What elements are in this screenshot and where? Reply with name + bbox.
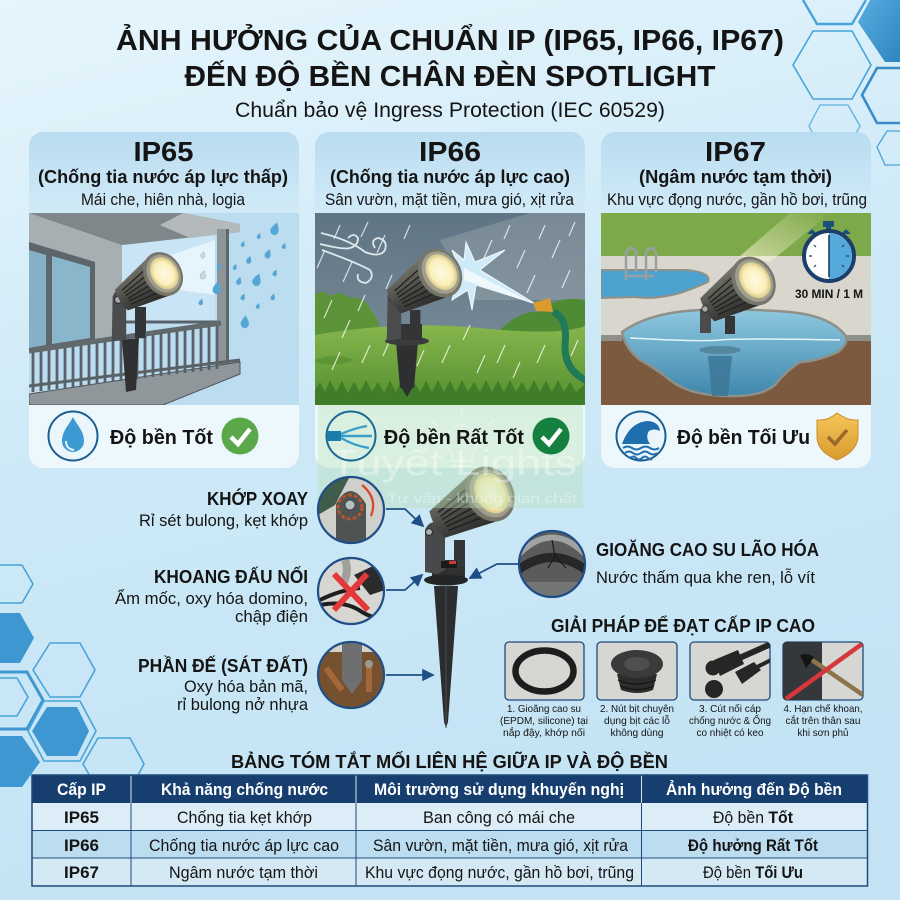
caption xyxy=(600,703,674,739)
table row: IP66: Độ hưởng Rất Tốt xyxy=(688,837,818,855)
decorative hexagons: bottom left xyxy=(0,565,144,790)
table header row: Ảnh hưởng đến Độ bền xyxy=(666,780,842,799)
caption: co nhiệt có keo xyxy=(696,727,764,739)
caption: nắp đậy, khớp nối xyxy=(503,726,585,739)
rating text: IP67: Độ bền Tối Ưu xyxy=(677,427,810,449)
caption: dụng bịt các lỗ xyxy=(604,714,670,727)
table row: IP67: Độ bền Tối Ưu xyxy=(703,864,803,882)
panel: IP66 xyxy=(315,132,590,468)
heading: IP65: IP65 xyxy=(134,136,194,167)
table header row: Môi trường sử dụng khuyến nghị xyxy=(374,780,624,799)
caption: không dùng xyxy=(610,727,664,739)
callout: Gioăng cao su xyxy=(470,531,819,598)
caption xyxy=(689,703,771,739)
table row: IP67: Ngâm nước tạm thời xyxy=(169,864,318,882)
panel: IP67 xyxy=(601,132,871,468)
table row: IP65: Ban công có mái che xyxy=(423,809,575,827)
callout heading: KHOANG ĐẤU NỐI xyxy=(154,566,308,587)
solution 3: waterproof connector xyxy=(689,642,771,739)
table row: IP66 xyxy=(64,836,818,855)
table row: IP65: Độ bền Tốt xyxy=(713,809,793,827)
table heading: BẢNG TÓM TẮT MỐI LIÊN HỆ GIỮA IP VÀ ĐỘ BỀN xyxy=(231,751,668,772)
usage text: IP66: Sân vườn, mặt tiền, mưa gió, xịt rửa xyxy=(325,191,575,209)
section heading: GIẢI PHÁP ĐỂ ĐẠT CẤP IP CAO xyxy=(551,615,815,636)
panel: IP65 xyxy=(29,132,299,468)
icon: stopwatch 30 min xyxy=(804,221,854,281)
rating text: IP66: Độ bền Rất Tốt xyxy=(384,427,524,449)
arrow xyxy=(386,509,423,526)
stopwatch caption: 30 MIN / 1 M xyxy=(795,289,863,301)
subheading: IP66: (Chống tia nước áp lực cao) xyxy=(330,166,570,187)
subheading: IP67: (Ngâm nước tạm thời) xyxy=(639,166,832,187)
icon: water jet xyxy=(326,412,376,460)
main spotlight diagram xyxy=(421,457,525,728)
solution 4: avoid drilling xyxy=(783,642,863,739)
detail circle: cracked gasket xyxy=(518,531,586,598)
callout: Phần đế xyxy=(138,642,433,714)
title xyxy=(116,23,784,93)
table row: IP66: Chống tia nước áp lực cao xyxy=(149,837,339,855)
callout: Khớp xoay xyxy=(139,476,423,545)
callout text: rỉ bulong nở nhựa xyxy=(177,695,309,714)
watermark: Tuyết Lights: Tuyết Lights xyxy=(330,442,577,483)
title: ẢNH HƯỞNG CỦA CHUẨN IP (IP65, IP66, IP67) xyxy=(116,23,784,57)
title: ĐẾN ĐỘ BỀN CHÂN ĐÈN SPOTLIGHT xyxy=(184,59,716,93)
table row: IP67: IP67 xyxy=(64,863,99,882)
caption: 4. Hạn chế khoan, xyxy=(784,703,862,715)
table row: IP65: Chống tia kẹt khớp xyxy=(177,809,312,827)
table header row: Cấp IP xyxy=(57,780,106,799)
illustration: balcony with spotlight and light rain xyxy=(29,213,299,405)
table row: IP65 xyxy=(64,808,793,827)
status strip: IP66 xyxy=(315,405,585,468)
icon: gold shield xyxy=(817,413,858,460)
section: solutions xyxy=(500,615,863,739)
callout text: Nước thấm qua khe ren, lỗ vít xyxy=(596,568,815,587)
subheading: IP65: (Chống tia nước áp lực thấp) xyxy=(38,166,288,187)
table header row xyxy=(57,780,842,799)
table row: IP65: IP65 xyxy=(64,808,99,827)
table row: IP66: IP66 xyxy=(64,836,99,855)
callout text: Ẩm mốc, oxy hóa domino, xyxy=(115,589,308,608)
solution 1: rubber gasket xyxy=(500,642,588,739)
arrow xyxy=(386,674,433,676)
caption xyxy=(784,703,862,739)
caption: khi sơn phủ xyxy=(798,727,849,739)
icon: dark green check xyxy=(532,418,570,454)
caption: (EPDM, silicone) tại xyxy=(500,715,588,727)
heading: IP67: IP67 xyxy=(705,136,766,167)
caption: cắt trên thân sau xyxy=(786,714,861,727)
icon: wave xyxy=(616,412,666,460)
status strip: IP67 xyxy=(601,405,871,468)
table row: IP67 xyxy=(64,863,803,882)
arrow xyxy=(470,564,518,578)
rating text: IP65: Độ bền Tốt xyxy=(110,427,213,449)
callout text xyxy=(177,677,309,714)
callout heading: KHỚP XOAY xyxy=(207,488,308,509)
illustration: rainy garden with hose spraying spotlight xyxy=(315,213,590,405)
callout: Khoang đấu nối xyxy=(115,558,422,626)
caption: 3. Cút nối cáp xyxy=(699,703,761,715)
detail circle: damaged wiring xyxy=(318,558,385,624)
heading: IP66: IP66 xyxy=(419,136,481,167)
status row content: IP66 xyxy=(326,412,570,460)
icon: green check xyxy=(222,418,258,454)
callout text xyxy=(115,589,308,626)
subtitle: Chuẩn bảo vệ Ingress Protection (IEC 60529) xyxy=(235,99,665,122)
callout heading: GIOĂNG CAO SU LÃO HÓA xyxy=(596,539,819,560)
solution 2: sealing plug xyxy=(597,642,677,739)
watermark: Tuyết Lights: Tư vấn - không gian chất xyxy=(387,490,577,506)
summary table xyxy=(32,775,868,886)
caption: 2. Nút bịt chuyên xyxy=(600,703,674,715)
usage text: IP65: Mái che, hiên nhà, logia xyxy=(81,191,246,209)
callout text: chập điện xyxy=(235,607,308,626)
caption xyxy=(500,703,588,739)
caption: chống nước & Ống xyxy=(689,713,771,727)
caption: 1. Gioăng cao su xyxy=(507,703,581,715)
detail circle: corroded base in soil xyxy=(318,642,384,708)
table header row: Khả năng chống nước xyxy=(161,780,328,799)
usage text: IP67: Khu vực đọng nước, gần hồ bơi, trũng xyxy=(607,191,867,209)
callout text: Oxy hóa bản mã, xyxy=(184,677,308,696)
decorative hexagons: top right xyxy=(793,0,900,165)
illustration: submerged spotlight in pool xyxy=(601,213,871,405)
detail circle: rusted pivot xyxy=(318,476,384,545)
icon: water drop xyxy=(48,412,98,460)
callout text: Rỉ sét bulong, kẹt khớp xyxy=(139,511,308,530)
table row: IP66: Sân vườn, mặt tiền, mưa gió, xịt rửa xyxy=(373,837,629,855)
table row: IP67: Khu vực đọng nước, gần hồ bơi, trũng xyxy=(365,864,634,882)
watermark: Tuyết Lights xyxy=(318,405,583,508)
callout heading: PHẦN ĐẾ (SÁT ĐẤT) xyxy=(138,655,308,676)
status strip: IP65 xyxy=(29,405,299,468)
arrow xyxy=(386,575,422,590)
